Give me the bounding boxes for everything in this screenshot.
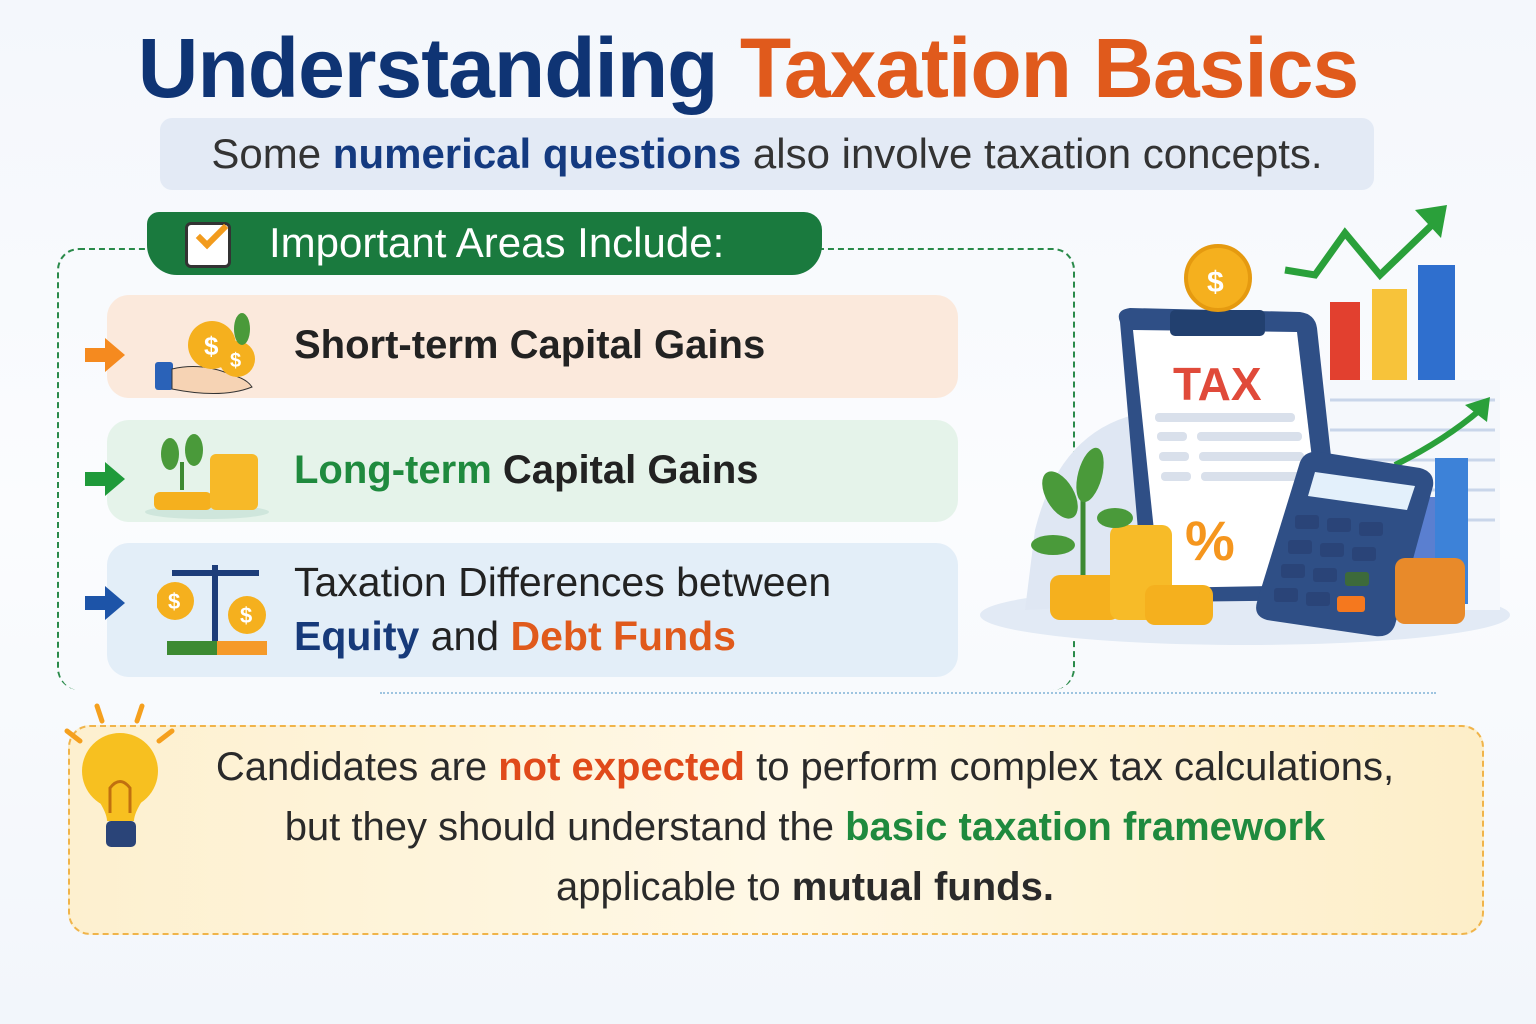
icon: scale: $ [240, 603, 252, 628]
title: Understanding Taxation Basics [138, 21, 1358, 115]
illustration: tax clipboard calculator [980, 205, 1510, 645]
callout text [216, 745, 1394, 909]
arrow orange [85, 338, 125, 372]
icon: money bags hand [155, 313, 255, 394]
callout box [68, 725, 1484, 935]
text: Short-term Capital Gains [294, 323, 765, 367]
row 2 [107, 420, 958, 522]
icon: light bulb [64, 704, 174, 847]
panel: important areas [57, 248, 1075, 690]
row 1 [107, 295, 958, 398]
illustration: tax clipboard calculator: TAX [1173, 358, 1262, 410]
callout text: Candidates are not expected to perform complex tax calculations, [216, 745, 1394, 789]
header tab [147, 212, 822, 275]
arrow blue [85, 586, 125, 620]
subtitle box [160, 118, 1374, 190]
header tab: Important Areas Include: [269, 219, 724, 266]
illustration: tax clipboard calculator: % [1185, 509, 1235, 572]
text [294, 559, 831, 659]
icon: checkbox [185, 222, 231, 268]
callout text: but they should understand the basic taxation framework [285, 805, 1325, 849]
arrow green [85, 462, 125, 496]
subtitle box: Some numerical questions also involve taxation concepts. [211, 130, 1323, 177]
icon: money bags hand: $ [230, 350, 241, 372]
icon: plant coins [145, 434, 269, 519]
icon: scale [157, 565, 267, 655]
icon: scale: $ [168, 589, 180, 614]
text: Equity and Debt Funds [294, 613, 736, 659]
icon: money bags hand: $ [204, 331, 219, 361]
divider dotted [380, 692, 1436, 694]
illustration: tax clipboard calculator: $ [1207, 266, 1224, 299]
callout text: applicable to mutual funds. [556, 865, 1054, 909]
text: Taxation Differences between [294, 559, 831, 605]
text: Long-term Capital Gains [294, 448, 759, 492]
row 3 [107, 543, 958, 677]
